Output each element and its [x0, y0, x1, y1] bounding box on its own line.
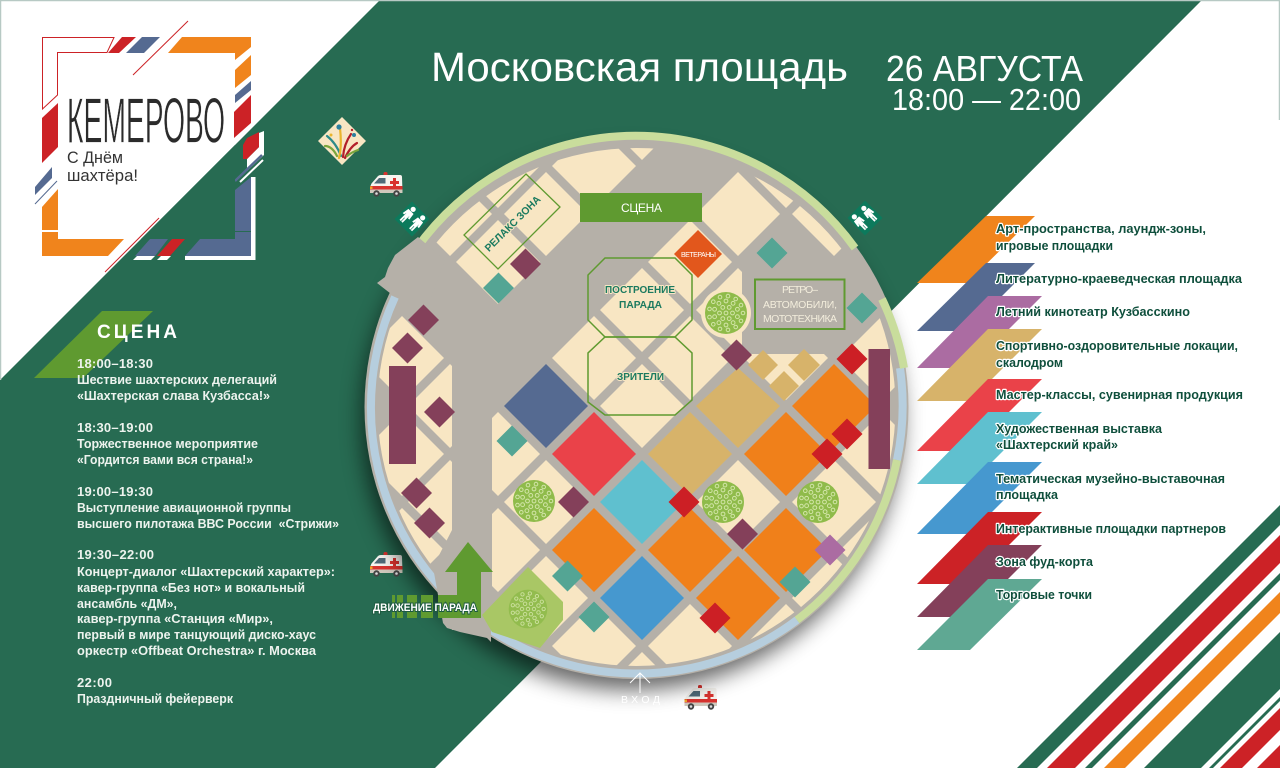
coloured zones: [504, 349, 876, 640]
parade formation zone: [588, 258, 692, 337]
date: 26 АВГУСТА: [886, 48, 1083, 89]
spectators zone: [588, 337, 692, 415]
retro cars box: АВТОМОБИЛИ,: [763, 299, 837, 311]
legend labels: Арт-пространства, лаундж-зоны,: [996, 221, 1206, 236]
programme item 19:30: Концерт-диалог «Шахтерский характер»:: [77, 564, 335, 579]
maroon food-court blocks: [389, 349, 890, 469]
maroon markers: [392, 248, 758, 550]
time: 18:00 — 22:00: [892, 82, 1081, 117]
legend labels: «Шахтерский край»: [996, 437, 1118, 452]
stage: СЦЕНА: [621, 201, 662, 215]
legend labels: Спортивно-оздоровительные локации,: [996, 338, 1238, 353]
logo: КЕМЕРОВО: [67, 84, 225, 156]
lower left gate: [433, 530, 492, 642]
legend labels: [996, 221, 1243, 602]
legend labels: скалодром: [996, 355, 1063, 370]
legend labels: Торговые точки: [996, 587, 1092, 602]
relax zone: [464, 174, 560, 269]
programme item 19:00: Выступление авиационной группы: [77, 500, 291, 515]
icon: toilets left: [396, 202, 428, 236]
icon: ambulance top left: [370, 172, 402, 197]
logo green corner: [141, 145, 235, 239]
legend labels: Летний кинотеатр Кузбасскино: [996, 304, 1190, 319]
programme item 22:00: 22:00: [77, 675, 112, 690]
icon: ambulance bottom: [684, 685, 717, 710]
legend labels: Мастер-классы, сувенирная продукция: [996, 387, 1243, 402]
spectators zone: ЗРИТЕЛИ: [617, 371, 664, 383]
programme item 19:30: кавер-группа «Станция «Мир»,: [77, 611, 273, 626]
relax zone: РЕЛАКС ЗОНА: [483, 193, 544, 254]
programme item 18:00: 18:00–18:30: [77, 356, 153, 371]
logo subtitle: [67, 149, 138, 185]
programme item 19:30: 19:30–22:00: [77, 547, 154, 562]
programme item 18:30: «Гордится вами вся страна!»: [77, 452, 253, 467]
programme item 18:30: Торжественное мероприятие: [77, 436, 258, 451]
legend labels: Литературно-краеведческая площадка: [996, 271, 1243, 286]
legend swatches: [917, 216, 1042, 650]
entrance marker: [621, 673, 660, 706]
map shadow: [362, 150, 902, 690]
veterans zone: [674, 230, 722, 278]
map rim: [371, 136, 904, 674]
programme item 18:00: «Шахтерская слава Кузбасса!»: [77, 388, 270, 403]
programme item 22:00: Праздничный фейерверк: [77, 691, 233, 706]
purple marker: [814, 534, 846, 566]
retro cars box: МОТОТЕХНИКА: [763, 313, 837, 325]
legend labels: Зона фуд-корта: [996, 554, 1094, 569]
programme item 22:00: [77, 675, 233, 706]
park pentagon: [482, 567, 563, 648]
trees: [509, 292, 839, 628]
logo subtitle: шахтёра!: [67, 167, 138, 185]
parade formation zone: ПОСТРОЕНИЕ: [605, 284, 675, 296]
left panel: stage programme: [34, 311, 339, 706]
programme item 19:00: 19:00–19:30: [77, 484, 153, 499]
veterans zone: ВЕТЕРАНЫ: [681, 252, 716, 259]
programme item 18:30: 18:30–19:00: [77, 420, 153, 435]
red markers: [668, 344, 868, 634]
legend labels: площадка: [996, 487, 1059, 502]
logo subtitle: С Днём: [67, 149, 123, 167]
retro cars box: [755, 280, 844, 329]
accent shape: [34, 311, 153, 378]
programme item 19:30: оркестр «Offbeat Orchestra» г. Москва: [77, 643, 317, 658]
entrance marker: ВХОД: [621, 694, 660, 706]
icon: fireworks: [318, 117, 366, 165]
legend labels: Тематическая музейно-выставочная: [996, 471, 1225, 486]
upper left gate: [377, 237, 445, 300]
legend: [917, 216, 1243, 650]
decorative corner stripes: [1017, 505, 1280, 768]
title: Московская площадь: [431, 44, 848, 90]
circular map: [350, 132, 918, 706]
programme item 19:30: первый в мире танцующий диско-хаус: [77, 627, 316, 642]
parade arrow: [373, 542, 493, 618]
icon: toilets right: [848, 202, 882, 234]
tree clearing: [701, 288, 751, 338]
map base: [364, 135, 908, 679]
central avenue: [452, 340, 492, 630]
retro area road: [742, 268, 832, 354]
logo: [35, 21, 264, 272]
icon: ambulance left: [370, 552, 402, 577]
programme item 18:00: Шествие шахтерских делегаций: [77, 372, 277, 387]
retro cars box: РЕТРО–: [782, 284, 818, 296]
cream plots: [379, 148, 895, 666]
teal markers: [483, 238, 878, 632]
programme item 18:00: [77, 356, 277, 403]
programme item 19:00: [77, 484, 339, 531]
legend labels: Художественная выставка: [996, 421, 1163, 436]
stage: [580, 193, 702, 222]
programme item 19:30: [77, 547, 335, 658]
legend labels: Интерактивные площадки партнеров: [996, 521, 1226, 536]
programme item 19:00: высшего пилотажа ВВС России «Стрижи»: [77, 516, 339, 531]
programme item 18:30: [77, 420, 258, 467]
programme heading: СЦЕНА: [97, 322, 177, 343]
legend labels: игровые площадки: [996, 238, 1113, 253]
logo frame: [35, 21, 264, 272]
programme item 19:30: ансамбль «ДМ»,: [77, 596, 177, 611]
parade arrow: ДВИЖЕНИЕ ПАРАДА: [373, 602, 477, 614]
parade formation zone: ПАРАДА: [619, 299, 662, 311]
programme item 19:30: кавер-группа «Без нот» и вокальный: [77, 580, 305, 595]
